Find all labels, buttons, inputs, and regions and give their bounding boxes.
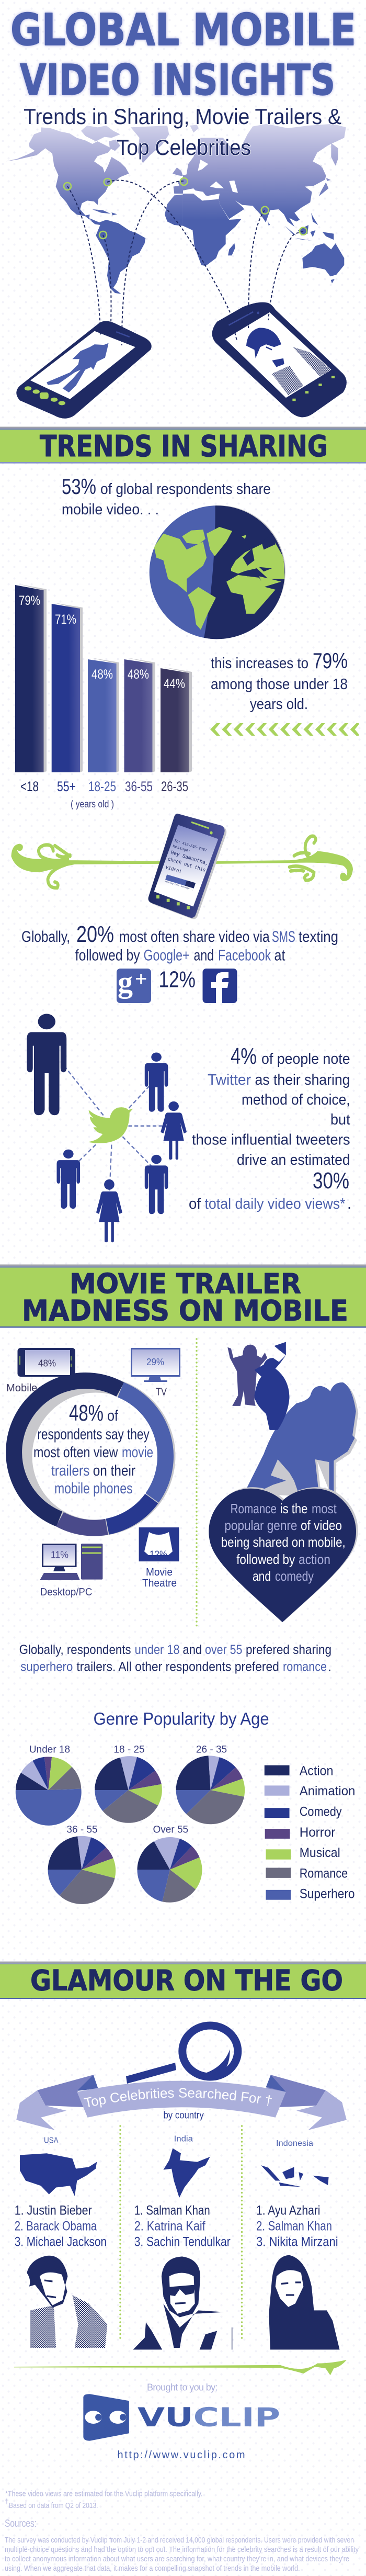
text: genre preferences: under 18 (135, 1643, 180, 1657)
text: SMS sharing: followed by (75, 947, 140, 964)
heart callout: romance: of video (301, 1517, 342, 1533)
heart callout: romance: Romance (231, 1501, 277, 1516)
icon: Google+ (117, 965, 151, 1003)
ribbon banner (16, 2075, 347, 2130)
bar chart: sharing by age: 48% (92, 667, 113, 682)
text: genre preferences: trailers. All other respondents prefered (76, 1660, 279, 1674)
phone: SMS: check out this (167, 856, 207, 874)
text: twitter stats: those influential tweeters (192, 1131, 350, 1148)
bar chart: sharing by age: 26-35 (161, 779, 188, 794)
column: USA (15, 2136, 107, 2348)
bar chart: sharing by age: 79% (19, 593, 40, 608)
text: SMS sharing: at (274, 947, 285, 964)
pie charts: genre by age: 36 - 55 (66, 1825, 98, 1836)
footnotes: Based on data from Q2 of 2013. (9, 2501, 98, 2510)
icon: theatre 12 percent: 12% (150, 1549, 167, 1559)
text: 53 percent share (62, 474, 271, 518)
bar chart: sharing by age (15, 584, 192, 810)
sources: using. When we aggregate that data, it makes for a compelling snapshot of trends in the mobile world. (5, 2564, 300, 2573)
donut chart: viewing device (14, 1380, 167, 1528)
icon: mobile 48 percent: 48% (38, 1358, 56, 1368)
text: genre preferences: Globally, respondents (19, 1643, 131, 1657)
donut chart: viewing device: trailers (51, 1463, 89, 1479)
column: USA: 1. Justin Bieber (15, 2203, 92, 2218)
heart callout: romance: followed by (236, 1551, 295, 1567)
heart callout: romance: popular genre (224, 1517, 297, 1533)
section band: movie trailer madness: MADNESS ON MOBILE (22, 1295, 348, 1328)
footer flourish (14, 2360, 347, 2375)
pie charts: genre by age: 26 - 35 (196, 1745, 227, 1756)
twitter network diagram (27, 1014, 187, 1242)
icon: TV 29 percent: 29% (146, 1357, 164, 1367)
icon: theatre 12 percent: Theatre (142, 1578, 177, 1589)
column: India: 2. Katrina Kaif (134, 2219, 205, 2234)
world map (6, 124, 346, 294)
text: increases to 79 percent: this increases to (211, 655, 308, 672)
column: India (133, 2135, 232, 2349)
column: USA: 2. Barack Obama (15, 2219, 97, 2234)
text: increases to 79 percent (211, 648, 348, 713)
text: twitter stats: as their sharing (255, 1072, 350, 1088)
phone: SMS: To: 419-555-2087 (174, 839, 207, 853)
phone: celebrity (212, 302, 347, 417)
legend: genres: Musical (300, 1846, 340, 1860)
heart callout: romance: action (299, 1551, 330, 1567)
heart callout: romance (209, 1487, 358, 1622)
text: SMS sharing: 20% (76, 921, 114, 947)
sources (5, 2518, 359, 2573)
text: twitter stats: total daily video views* (205, 1196, 345, 1212)
icon: mobile 48 percent: Mobile (6, 1382, 37, 1394)
heading: genre popularity: Genre Popularity by Age (94, 1709, 269, 1728)
icon: TV 29 percent (132, 1349, 180, 1398)
text: genre preferences: . (328, 1660, 331, 1674)
donut chart: viewing device: most often view (33, 1444, 118, 1461)
text: SMS sharing: texting (299, 928, 338, 946)
column: Indonesia: 2. Salman Khan (256, 2219, 332, 2234)
donut chart: viewing device: mobile phones (54, 1480, 133, 1497)
text: SMS sharing: Google+ (143, 947, 189, 964)
pie charts: genre by age: Over 55 (153, 1825, 188, 1836)
text: website: http://www.vuclip.com (117, 2449, 245, 2461)
bar chart: sharing by age: ( years old ) (71, 799, 114, 810)
column: Indonesia: 3. Nikita Mirzani (256, 2235, 338, 2249)
donut chart: viewing device: of (107, 1408, 119, 1424)
phone: SMS: Message: (172, 845, 191, 854)
subtitle (24, 104, 341, 160)
donut chart: viewing device: on their (93, 1463, 135, 1479)
donut chart: viewing device: 48% (69, 1400, 104, 1426)
text: increases to 79 percent: among those under 18 (211, 676, 348, 693)
text: 12 percent: 12% (159, 967, 196, 992)
pie charts: genre by age: Under 18 (29, 1745, 70, 1756)
text: twitter stats: Twitter (208, 1072, 251, 1088)
text: increases to 79 percent: 79% (313, 648, 348, 673)
legend: genres: Romance (300, 1866, 348, 1881)
text: genre preferences: over 55 (205, 1643, 242, 1657)
legend: genres: Comedy (300, 1804, 342, 1819)
logo: Vuclip (83, 2394, 280, 2441)
text: genre preferences: prefered sharing (246, 1643, 331, 1657)
phone: SMS: sending text message... (164, 880, 193, 892)
text: SMS sharing: Facebook (218, 947, 271, 964)
text: brought to you by: Brought to you by: (147, 2382, 218, 2393)
donut chart: viewing device: movie (122, 1444, 153, 1461)
footnotes: *These video views are estimated for the Vuclip platform specifically. (5, 2490, 203, 2499)
text: twitter stats: method of choice, (242, 1092, 350, 1108)
text: genre preferences: romance (283, 1660, 327, 1674)
text: SMS sharing: and (193, 947, 214, 964)
heart callout: romance: being shared on mobile, (221, 1534, 346, 1550)
column: USA: 3. Michael Jackson (15, 2235, 107, 2249)
text: by country: by country (163, 2110, 204, 2121)
text: SMS sharing: most often share video via (119, 928, 270, 946)
column: Indonesia: 1. Ayu Azhari (256, 2203, 320, 2218)
heart callout: romance: most (312, 1501, 337, 1516)
column: India: 3. Sachin Tendulkar (134, 2235, 231, 2249)
text: SMS sharing (21, 921, 338, 964)
bar chart: sharing by age: 18-25 (88, 779, 116, 794)
icon: TV 29 percent: TV (156, 1387, 167, 1398)
icon: Facebook (203, 969, 237, 1003)
donut chart: viewing device: respondents say they (37, 1426, 150, 1443)
bar chart: sharing by age: 36-55 (125, 779, 153, 794)
icon: Google+: + (135, 968, 147, 991)
text: SMS sharing: SMS (272, 928, 295, 946)
bar chart: sharing by age: 55+ (57, 779, 76, 794)
legend: genres: Superhero (300, 1887, 354, 1902)
bar chart: sharing by age: <18 (20, 779, 39, 794)
text: twitter stats: of (189, 1196, 201, 1212)
flourish (11, 836, 353, 888)
connection lines and markers (64, 178, 307, 345)
column: Indonesia (256, 2139, 340, 2349)
column: Indonesia: Indonesia (276, 2139, 313, 2148)
text: twitter stats: drive an estimated (237, 1152, 350, 1168)
icon: Google+: g (118, 965, 133, 999)
silhouettes: action, comedy and romance (227, 1342, 358, 1496)
bar chart: sharing by age: 71% (55, 612, 76, 627)
icon: desktop 11 percent: 11% (51, 1550, 68, 1560)
footnotes: † (5, 2497, 9, 2505)
icon: mobile 48 percent (6, 1348, 75, 1394)
icon: desktop 11 percent: Desktop/PC (40, 1587, 92, 1598)
footnotes (5, 2490, 203, 2510)
globe (147, 504, 287, 640)
subtitle: Trends in Sharing, Movie Trailers & (24, 104, 341, 129)
text: genre preferences: and (183, 1643, 202, 1657)
icon: theatre 12 percent: Movie (146, 1567, 173, 1578)
text: 53 percent share: of global respondents share (100, 481, 271, 498)
icon: theatre 12 percent (139, 1527, 179, 1589)
bar chart: sharing by age: 44% (164, 677, 185, 691)
column dividers (120, 2126, 242, 2339)
phone: superhero (16, 321, 152, 419)
phone: SMS: video! (165, 864, 182, 875)
heart callout: romance: is the (280, 1501, 307, 1516)
heart callout: romance: and (253, 1568, 271, 1584)
divider dots (196, 1339, 198, 1629)
text: twitter stats: but (330, 1111, 350, 1128)
ribbon banner: Top Celebrities Searched For † (84, 2088, 272, 2108)
text: genre preferences: superhero (20, 1660, 73, 1674)
column: India: India (174, 2135, 193, 2143)
icon: magnifying glass (126, 2026, 238, 2084)
bar chart: sharing by age: 48% (128, 667, 149, 682)
text: twitter stats: of people note (261, 1051, 350, 1067)
section band: movie trailer madness (0, 1264, 366, 1328)
column: USA: USA (44, 2136, 59, 2145)
heart callout: romance: comedy (275, 1568, 314, 1584)
text: 53 percent share: 53% (62, 474, 96, 499)
icon: desktop 11 percent (40, 1544, 102, 1598)
chevron arrows (210, 723, 359, 736)
legend: genres (265, 1763, 355, 1902)
text: SMS sharing: Globally, (21, 928, 70, 946)
column: India: 1. Salman Khan (134, 2203, 210, 2218)
text: twitter stats: 30% (313, 1168, 349, 1194)
pie charts: genre by age (16, 1745, 245, 1904)
text: increases to 79 percent: years old. (250, 696, 308, 713)
phone: SMS: Hey Samantha, (170, 850, 209, 867)
logo: Vuclip: VU CLIP (138, 2402, 280, 2433)
text: 53 percent share: mobile video. . . (62, 501, 159, 518)
legend: genres: Horror (300, 1825, 335, 1840)
text: twitter stats: 4% (231, 1043, 257, 1069)
section band: movie trailer madness: MOVIE TRAILER (70, 1268, 301, 1300)
legend: genres: Action (300, 1763, 333, 1778)
text: genre preferences (19, 1643, 331, 1674)
text: twitter stats (189, 1043, 351, 1212)
legend: genres: Animation (300, 1784, 355, 1798)
phone: SMS (148, 814, 226, 919)
title (10, 4, 356, 105)
pie charts: genre by age: 18 - 25 (113, 1745, 145, 1756)
sources: Sources: (5, 2518, 37, 2529)
text: twitter stats: . (347, 1196, 351, 1212)
subtitle: Top Celebrities (117, 135, 251, 160)
